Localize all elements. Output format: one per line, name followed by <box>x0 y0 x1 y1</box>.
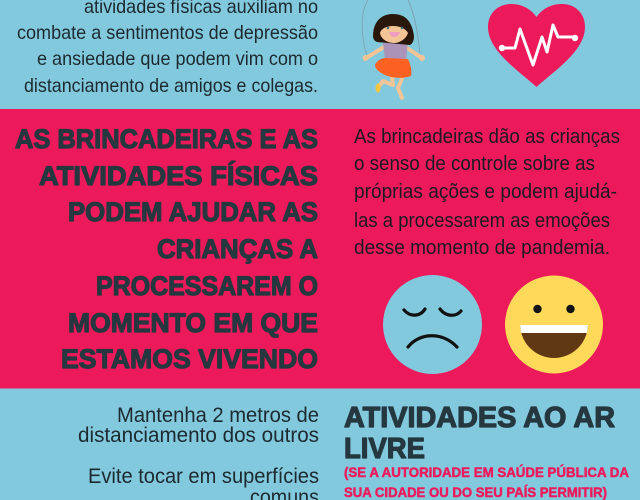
panel: top blue band <box>0 0 640 109</box>
icon: sad face <box>383 275 482 374</box>
icon: heart with pulse line <box>488 4 585 87</box>
heading: outdoor activities <box>344 402 615 465</box>
heading: play and physical activity: PODEM AJUDAR AS <box>68 197 318 227</box>
heading: play and physical activity: MOMENTO EM QUE <box>68 308 318 338</box>
subheading: public health authority note: SUA CIDADE OU DO SEU PAÍS PERMITIR) <box>344 484 607 500</box>
text block: distancing advice <box>78 404 319 500</box>
heading: play and physical activity: PROCESSAREM O <box>96 271 318 301</box>
panel: bottom blue band <box>0 388 640 500</box>
heading: outdoor activities: ATIVIDADES AO AR <box>344 402 615 434</box>
text block: distancing advice: Mantenha 2 metros de <box>117 404 319 427</box>
text block: sense of control <box>354 126 620 259</box>
text block: sense of control: las a processarem as emoções <box>354 210 610 232</box>
text block: benefits of physical activity: e ansiedade que podem vim com o <box>37 48 318 70</box>
text block: sense of control: o senso de controle sobre as <box>354 153 595 175</box>
heading: outdoor activities: LIVRE <box>344 433 425 465</box>
heading: play and physical activity: ATIVIDADES FÍSICAS <box>39 160 318 191</box>
panel: pink band <box>0 109 640 388</box>
heading: play and physical activity <box>15 124 318 374</box>
text block: sense of control: próprias ações e podem ajudá- <box>354 181 617 203</box>
text block: sense of control: desse momento de pandemia. <box>354 237 610 259</box>
text block: benefits of physical activity: combate a sentimentos de depressão <box>17 22 318 44</box>
text block: benefits of physical activity <box>17 0 318 97</box>
heading: play and physical activity: AS BRINCADEIRAS E AS <box>15 124 318 154</box>
text block: sense of control: As brincadeiras dão as crianças <box>354 126 620 148</box>
subheading: public health authority note <box>344 463 629 500</box>
icon: girl jumping rope <box>362 0 425 98</box>
text block: distancing advice: distanciamento dos outros <box>78 424 319 447</box>
heading: play and physical activity: ESTAMOS VIVENDO <box>61 344 318 374</box>
text block: benefits of physical activity: distanciamento de amigos e colegas. <box>24 75 318 97</box>
subheading: public health authority note: (SE A AUTORIDADE EM SAÚDE PÚBLICA DA <box>344 463 629 480</box>
text block: distancing advice: Evite tocar em superfícies <box>88 465 319 488</box>
heading: play and physical activity: CRIANÇAS A <box>157 234 318 264</box>
icon: laughing face <box>505 276 603 374</box>
